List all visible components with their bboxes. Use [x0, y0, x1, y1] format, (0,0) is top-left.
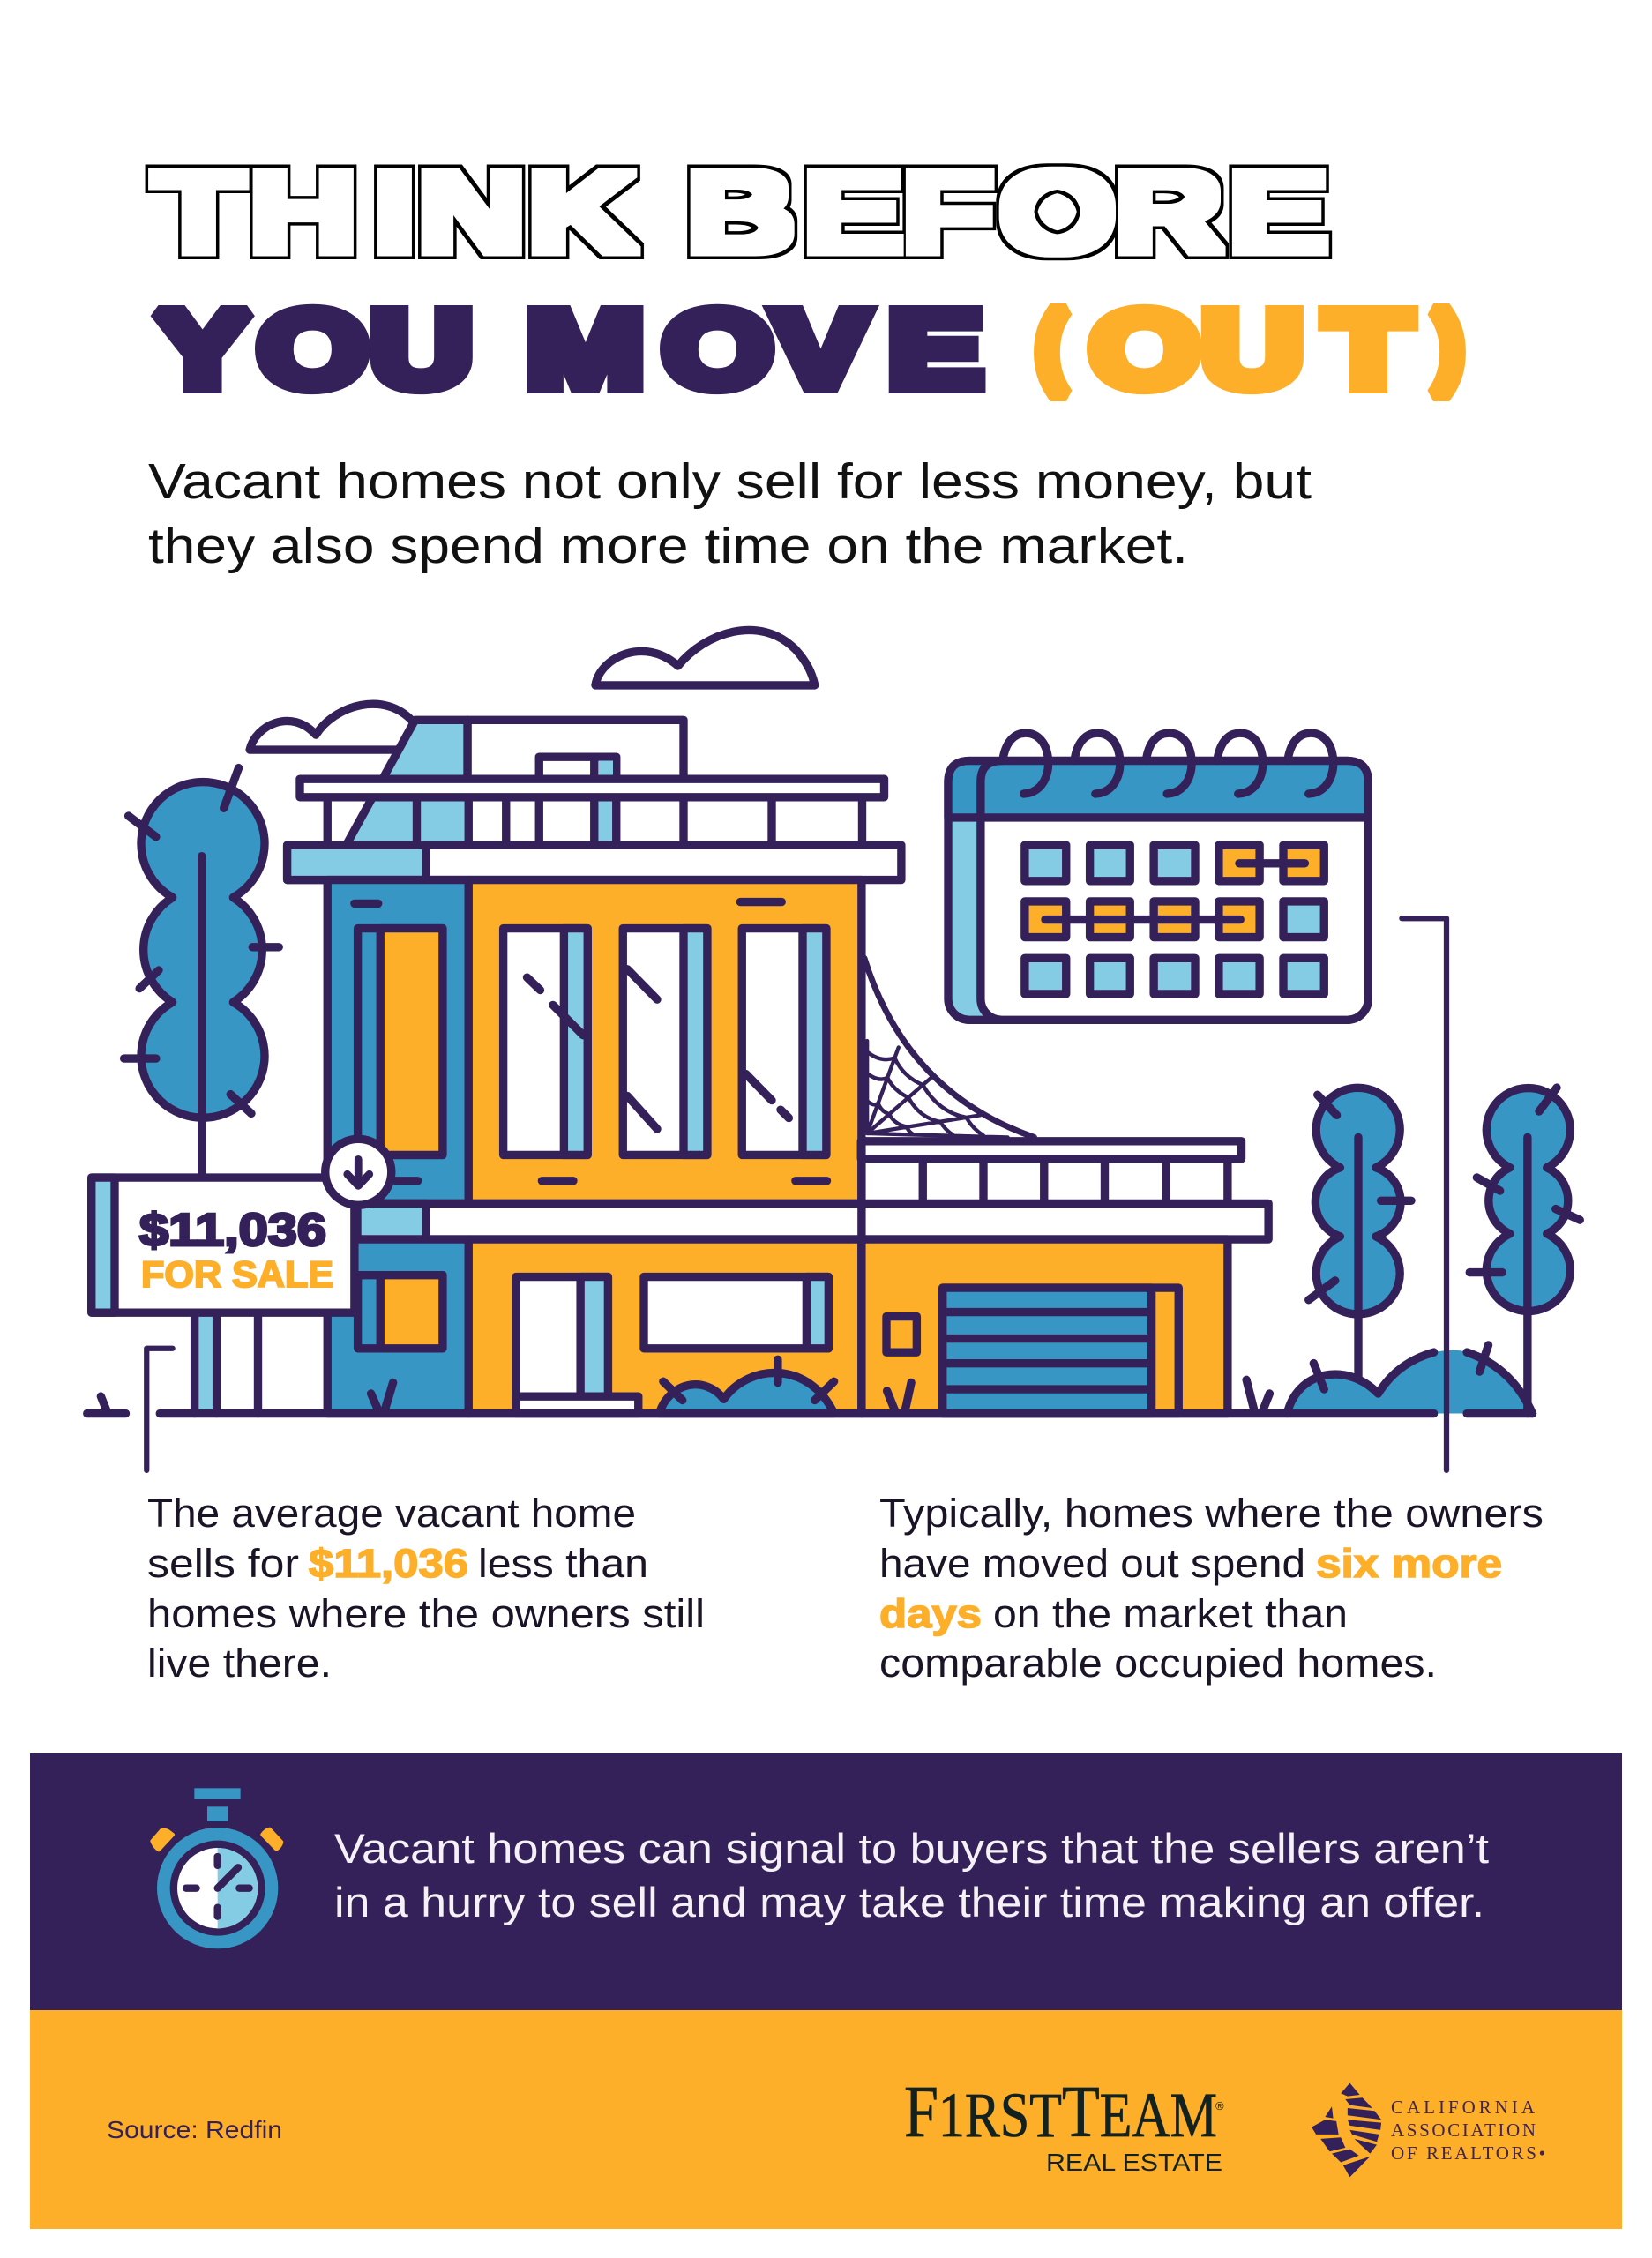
middle slab [357, 1140, 1268, 1413]
title line 2: purple: YOU MOVE [156, 289, 982, 409]
calendar day cells [1025, 845, 1324, 994]
text block: right [879, 1491, 1544, 1686]
roof lower slab [288, 845, 901, 880]
cloud: behind house [250, 704, 413, 750]
title line 2: orange: ( [1036, 295, 1066, 395]
lower floor left window [358, 1275, 443, 1349]
logo text: California Association of Realtors: ASSOCIATION [1391, 2120, 1536, 2141]
panel: purple banner [30, 1753, 1622, 2011]
grass tufts [101, 1379, 1269, 1410]
panel: orange footer [30, 2010, 1622, 2229]
lower floor wide window [644, 1277, 828, 1349]
down-arrow badge [325, 1139, 392, 1205]
upper floor window 2 [623, 928, 707, 1155]
roof railing [327, 797, 863, 845]
subheading: Vacant homes not only sell for less money, but [148, 453, 1312, 510]
text block: left: less than [478, 1541, 648, 1586]
leader line: right [1402, 918, 1446, 1470]
illustration: vacant house scene [87, 630, 1580, 1470]
cloud: top [595, 630, 815, 685]
text block: left: sells for [147, 1541, 299, 1586]
small wall vent [886, 1316, 916, 1352]
roof penthouse [346, 720, 684, 845]
garage wing railing [861, 1141, 1242, 1203]
source note: Source: Redfin [107, 2116, 282, 2143]
text block: left: The average vacant home [147, 1491, 636, 1536]
tree: right 2 [1469, 1088, 1580, 1413]
calendar header [948, 760, 1368, 818]
lower floor walls [327, 1239, 1228, 1413]
leader line: left [146, 1349, 173, 1470]
porch posts [195, 1311, 258, 1413]
logo: First Team Real Estate: F1RSTTEAM [904, 2071, 1217, 2153]
text block: right: days [879, 1591, 982, 1636]
calendar front page [981, 760, 1368, 1020]
logo: First Team Real Estate: ® [1215, 2099, 1224, 2112]
front door [516, 1277, 639, 1413]
upper floor window 3 [742, 928, 826, 1155]
sign text: FOR SALE [141, 1253, 333, 1295]
text block: right: six more [1316, 1541, 1502, 1586]
garage door [943, 1288, 1178, 1413]
crossed-off day lines [1045, 864, 1304, 919]
text block: left: live there. [147, 1641, 332, 1686]
sign text: $11,036 [139, 1205, 326, 1256]
title [153, 148, 1463, 409]
subheading [148, 453, 1312, 574]
title line 1: outlined: THINK BEFORE [153, 148, 1328, 276]
upper floor window 1 [504, 928, 587, 1155]
wall brick dashes [355, 901, 1184, 1385]
logo text: California Association of Realtors: CALIFORNIA [1391, 2097, 1536, 2118]
upper floor walls [327, 880, 862, 1203]
text block: left [147, 1491, 705, 1686]
title line 2: orange: ) [1433, 295, 1463, 395]
tree: left [124, 768, 279, 1178]
logo: First Team Real Estate: REAL ESTATE [1046, 2149, 1222, 2176]
title line 2: orange: OUT [1090, 289, 1411, 409]
banner text [334, 1825, 1489, 1925]
logo: California Association of Realtors emblem [1312, 2083, 1381, 2177]
tree: right 1 [1309, 1088, 1411, 1377]
text block: right: have moved out spend [879, 1541, 1305, 1586]
text block: right: comparable occupied homes. [879, 1641, 1437, 1686]
subheading: they also spend more time on the market. [148, 518, 1188, 574]
sign text [139, 1205, 333, 1295]
text block: right: Typically, homes where the owners [879, 1491, 1544, 1536]
text block: right: on the market than [993, 1591, 1348, 1636]
banner text: Vacant homes can signal to buyers that the sellers aren’t [334, 1825, 1489, 1872]
bush: right [1287, 1345, 1533, 1413]
calendar back page [948, 760, 1368, 1020]
upper floor left window [358, 928, 443, 1155]
logo text: California Association of Realtors [1391, 2097, 1545, 2164]
text block: left: homes where the owners still [147, 1591, 705, 1636]
ground line [87, 1407, 1533, 1420]
spider web [864, 958, 1034, 1137]
logo text: California Association of Realtors: OF REALTORS• [1391, 2142, 1545, 2164]
calendar [948, 733, 1368, 1020]
roof top slab [300, 779, 884, 797]
bush: front [660, 1359, 834, 1413]
calendar spiral rings [1003, 733, 1334, 794]
for sale sign board [92, 1178, 355, 1312]
text block: left: $11,036 [309, 1541, 468, 1586]
banner text: in a hurry to sell and may take their time making an offer. [334, 1879, 1484, 1925]
icon: stopwatch [152, 1788, 281, 1948]
